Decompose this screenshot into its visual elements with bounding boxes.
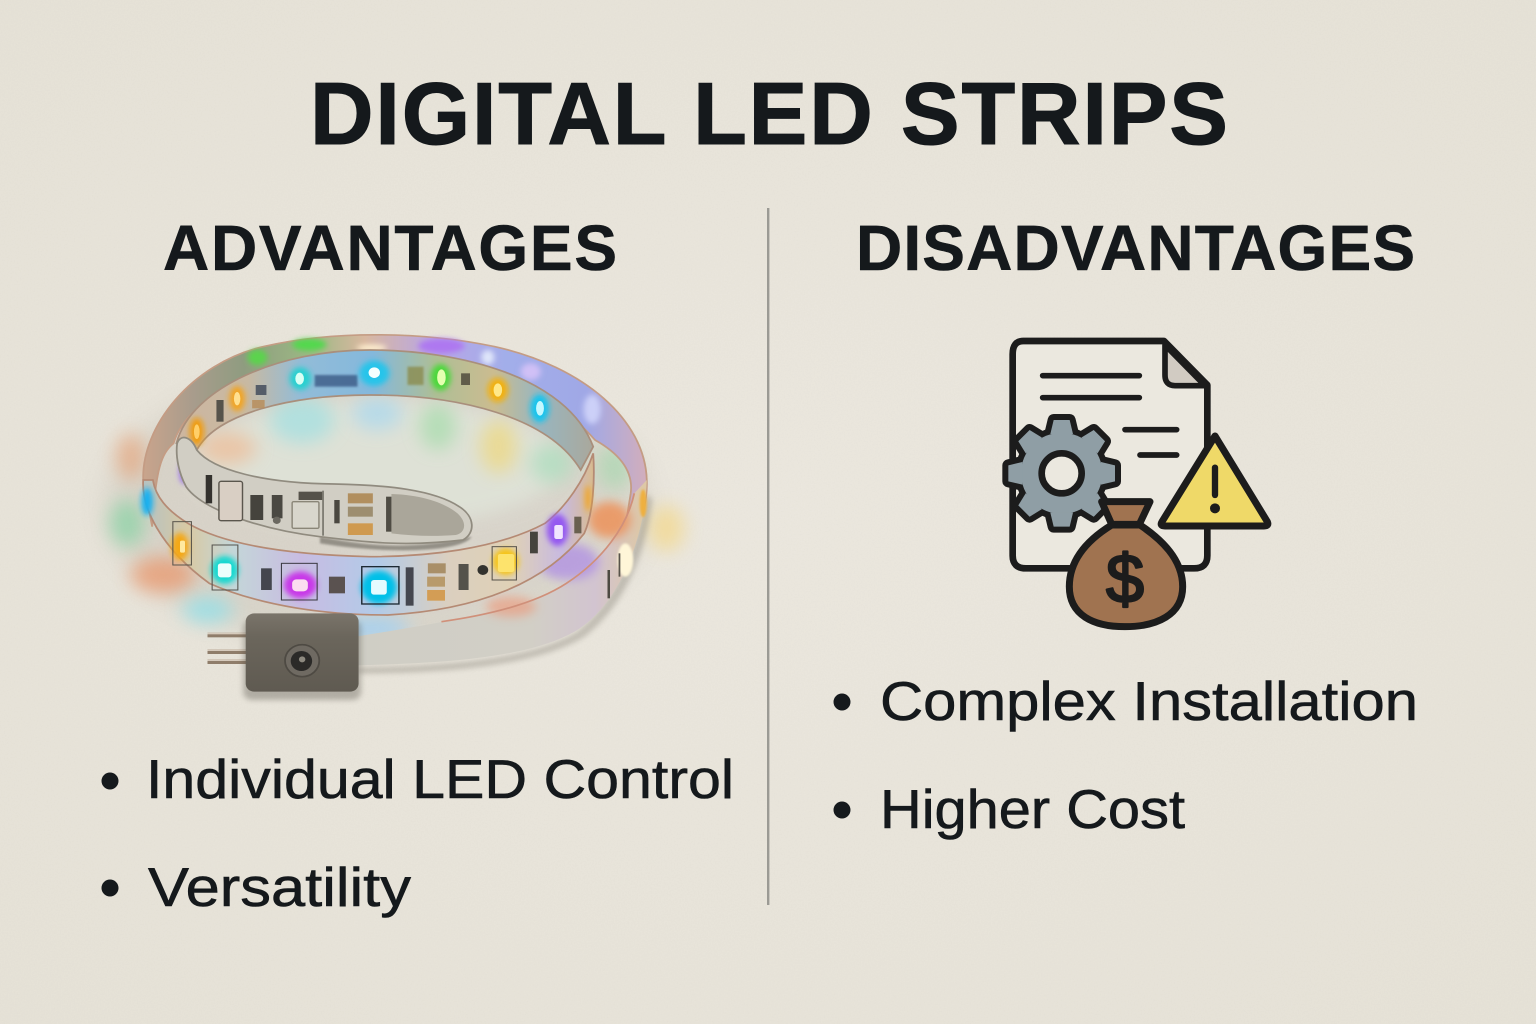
- ground light glows: [106, 363, 684, 650]
- panel: advantages: [102, 212, 734, 918]
- icon: money bag: [1069, 502, 1183, 627]
- outer strip tail: [356, 480, 647, 665]
- connector shadow: [243, 620, 361, 700]
- heading: advantages: ADVANTAGES: [163, 212, 617, 284]
- inner strip front marks: [206, 475, 391, 536]
- connector pins: [207, 633, 247, 664]
- panel: disadvantages: [834, 212, 1418, 840]
- front strip band: [143, 453, 594, 615]
- icon: gear: [1008, 420, 1115, 527]
- bullet: complex installation: Complex Installation: [880, 670, 1418, 732]
- strip end tab: [391, 494, 464, 536]
- inner strip printed marks: [216, 367, 470, 422]
- outer strip rear band: [143, 335, 647, 560]
- bullet list: disadvantages: [834, 670, 1418, 840]
- outer strip top glows: [247, 339, 601, 424]
- icon: money bag: $: [1106, 541, 1144, 617]
- shadow beneath inner front section: [320, 537, 472, 550]
- center divider: [767, 208, 769, 905]
- illustration: digital LED strip coil: [106, 335, 684, 700]
- tail drop shadow: [359, 493, 652, 673]
- front strip LEDs: [141, 485, 591, 604]
- inner strip front section with end tip: [177, 438, 472, 543]
- inner strip LEDs: [179, 361, 549, 484]
- bullet: higher cost: Higher Cost: [880, 778, 1185, 840]
- icon: document, gear, warning and money bag: [1008, 341, 1268, 627]
- connector jack: [285, 645, 319, 677]
- front strip printed marks: [261, 517, 581, 606]
- bullet list: advantages: [102, 748, 734, 918]
- bullet: versatility: Versatility: [148, 856, 412, 918]
- bullet: individual LED control: Individual LED Control: [146, 748, 734, 810]
- connector body: [246, 613, 359, 692]
- inner strip rear band: [176, 350, 593, 470]
- title: DIGITAL LED STRIPS: [310, 64, 1228, 163]
- heading: disadvantages: DISADVANTAGES: [856, 212, 1415, 284]
- icon: document: [1013, 341, 1207, 568]
- icon: warning triangle: [1161, 436, 1268, 526]
- tail glows and LEDs: [441, 489, 647, 622]
